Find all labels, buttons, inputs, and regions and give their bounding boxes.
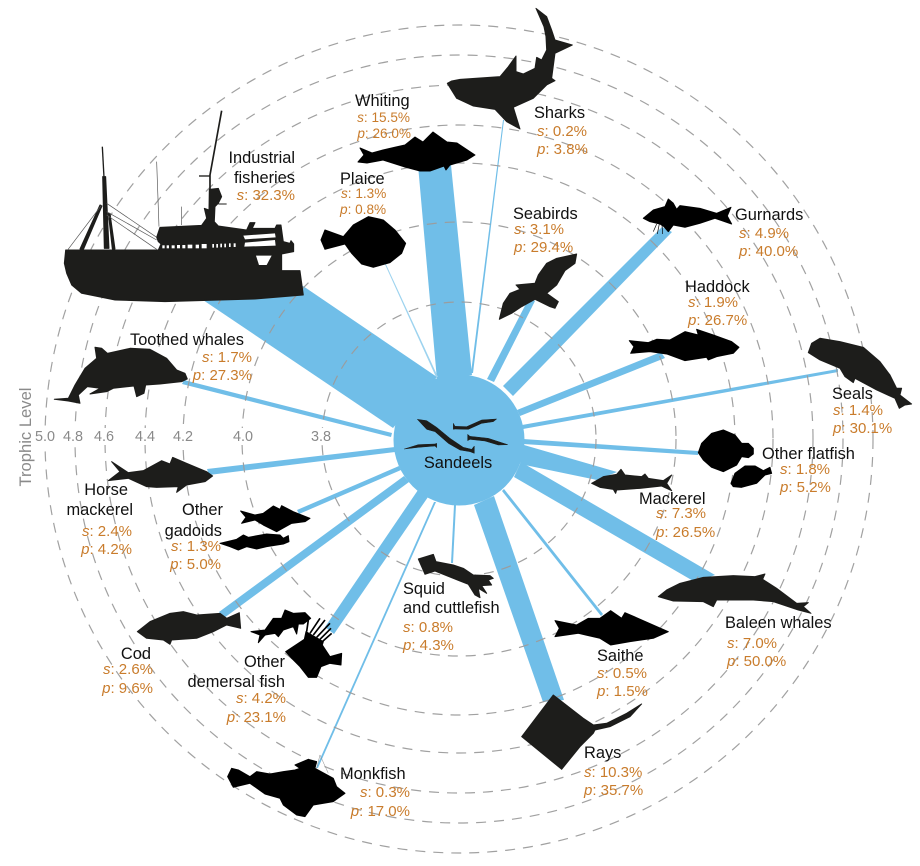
label: toothed whales bbox=[130, 331, 252, 384]
label: squid and cuttlefish: and cuttlefish bbox=[403, 599, 500, 617]
label: sharks: p: 3.8% bbox=[536, 141, 588, 158]
label: mackerel: s: 7.3% bbox=[656, 505, 706, 522]
label: industrial fisheries: Industrial bbox=[228, 149, 295, 167]
band: other demersal fish bbox=[325, 490, 428, 634]
band: monkfish bbox=[316, 502, 436, 768]
label: cod bbox=[101, 645, 153, 697]
label: saithe: Saithe bbox=[597, 647, 643, 665]
band: haddock bbox=[517, 352, 665, 416]
label: cod: p: 9.6% bbox=[101, 680, 153, 697]
label: haddock: s: 1.9% bbox=[688, 294, 738, 311]
label: rays: p: 35.7% bbox=[583, 782, 643, 799]
band: plaice bbox=[383, 260, 438, 377]
label: other demersal fish: Other bbox=[244, 653, 286, 671]
axis: trophic level: 4.0 bbox=[233, 429, 253, 445]
label: haddock bbox=[685, 278, 750, 329]
label: monkfish: Monkfish bbox=[340, 765, 406, 783]
axis: trophic level: 5.0 bbox=[35, 429, 55, 445]
label: other flatfish bbox=[762, 445, 855, 496]
label: horse mackerel bbox=[66, 481, 133, 558]
label: saithe bbox=[596, 647, 648, 700]
icon: other demersal fish bbox=[251, 610, 342, 677]
label: squid and cuttlefish bbox=[402, 580, 500, 654]
label: squid and cuttlefish: p: 4.3% bbox=[402, 637, 454, 654]
label: squid and cuttlefish: Squid bbox=[403, 580, 445, 598]
label: haddock: Haddock bbox=[685, 278, 750, 296]
label: gurnards: s: 4.9% bbox=[739, 225, 789, 242]
label: seabirds bbox=[513, 205, 578, 256]
band: whiting bbox=[418, 165, 472, 380]
band: toothed whales bbox=[182, 380, 392, 437]
band: saithe bbox=[502, 489, 603, 616]
label: plaice: Plaice bbox=[340, 170, 385, 188]
icon: horse mackerel bbox=[108, 457, 213, 492]
icon: toothed whale bbox=[54, 347, 187, 403]
label: gurnards bbox=[735, 206, 803, 260]
band: rays bbox=[474, 496, 564, 702]
band: sharks bbox=[471, 120, 504, 373]
label: other flatfish: p: 5.2% bbox=[779, 479, 831, 496]
label: other gadoids: s: 1.3% bbox=[171, 538, 221, 555]
icon: gurnard bbox=[643, 199, 732, 234]
icon: cod bbox=[137, 612, 241, 644]
band: industrial fisheries bbox=[203, 286, 437, 428]
label: rays bbox=[583, 744, 643, 799]
icon: plaice bbox=[321, 217, 406, 267]
label: cod: s: 2.6% bbox=[103, 661, 153, 678]
label: monkfish: s: 0.3% bbox=[360, 784, 410, 801]
label: horse mackerel: s: 2.4% bbox=[82, 523, 132, 540]
axis: trophic level: 3.8 bbox=[311, 429, 331, 445]
label: industrial fisheries: fisheries bbox=[234, 169, 295, 187]
icon: ray bbox=[522, 695, 642, 769]
band: other flatfish bbox=[523, 439, 698, 455]
icon: other gadoids bbox=[220, 506, 310, 550]
label: other gadoids: Other bbox=[182, 501, 224, 519]
label: seabirds: p: 29.4% bbox=[513, 239, 573, 256]
icon: baleen whale bbox=[658, 574, 811, 613]
axis: trophic level: 4.2 bbox=[173, 429, 193, 445]
icon: monkfish bbox=[228, 755, 345, 817]
label: cod: Cod bbox=[121, 645, 151, 663]
icon: whiting bbox=[358, 132, 475, 171]
label: whiting: p: 26.0% bbox=[356, 126, 411, 141]
label: toothed whales: Toothed whales bbox=[130, 331, 244, 349]
label: sharks bbox=[534, 104, 588, 158]
band: baleen whales bbox=[514, 462, 715, 582]
icon: mackerel bbox=[592, 469, 672, 493]
label: toothed whales: s: 1.7% bbox=[202, 349, 252, 366]
label: other gadoids: gadoids bbox=[165, 522, 222, 540]
central circle: sandeels bbox=[394, 374, 524, 506]
label: saithe: s: 0.5% bbox=[597, 665, 647, 682]
label: sandeels: Sandeels bbox=[424, 454, 492, 472]
label: other demersal fish: demersal fish bbox=[188, 673, 285, 691]
label: haddock: p: 26.7% bbox=[687, 312, 747, 329]
axis: trophic level: 4.4 bbox=[135, 429, 155, 445]
label: baleen whales bbox=[725, 614, 832, 670]
label: sharks: Sharks bbox=[534, 104, 585, 122]
label: seals: Seals bbox=[832, 385, 873, 403]
label: monkfish bbox=[340, 765, 410, 820]
label: horse mackerel: Horse bbox=[84, 481, 128, 499]
icon: seal bbox=[808, 338, 912, 408]
label: plaice bbox=[339, 170, 386, 217]
label: other demersal fish: s: 4.2% bbox=[236, 690, 286, 707]
label: other flatfish: s: 1.8% bbox=[780, 461, 830, 478]
icon: sandeels bbox=[404, 419, 508, 453]
label: other demersal fish bbox=[188, 653, 286, 726]
label: industrial fisheries bbox=[228, 149, 295, 204]
label: seals: p: 30.1% bbox=[832, 420, 892, 437]
label: mackerel: p: 26.5% bbox=[655, 524, 715, 541]
label: whiting: Whiting bbox=[355, 92, 410, 110]
label: plaice: s: 1.3% bbox=[341, 186, 386, 201]
label: toothed whales: p: 27.3% bbox=[192, 367, 252, 384]
label: plaice: p: 0.8% bbox=[339, 202, 386, 217]
label: other flatfish: Other flatfish bbox=[762, 445, 855, 463]
band: gurnards bbox=[503, 227, 672, 396]
label: monkfish: p: 17.0% bbox=[350, 803, 410, 820]
label: rays: Rays bbox=[584, 744, 621, 762]
band: horse mackerel bbox=[207, 447, 395, 475]
band: seals bbox=[522, 369, 838, 429]
icon: saithe bbox=[555, 611, 668, 645]
axis: trophic level: Trophic Level bbox=[16, 388, 35, 486]
icon: haddock bbox=[629, 329, 739, 361]
label: other demersal fish: p: 23.1% bbox=[226, 709, 286, 726]
band: cod bbox=[219, 476, 409, 618]
band: other gadoids bbox=[297, 466, 401, 514]
label: whiting: s: 15.5% bbox=[357, 110, 410, 125]
axis: trophic level: 4.6 bbox=[94, 429, 114, 445]
label: industrial fisheries: s: 32.3% bbox=[237, 187, 295, 204]
label: baleen whales: s: 7.0% bbox=[727, 635, 777, 652]
label: whiting bbox=[355, 92, 411, 141]
label: baleen whales: Baleen whales bbox=[725, 614, 832, 632]
label: horse mackerel: mackerel bbox=[66, 501, 133, 519]
label: other gadoids bbox=[165, 501, 224, 573]
label: seals: s: 1.4% bbox=[833, 402, 883, 419]
label: other gadoids: p: 5.0% bbox=[169, 556, 221, 573]
label: sharks: s: 0.2% bbox=[537, 123, 587, 140]
label: baleen whales: p: 50.0% bbox=[726, 653, 786, 670]
label: seabirds: Seabirds bbox=[513, 205, 578, 223]
label: gurnards: Gurnards bbox=[735, 206, 803, 224]
icon: industrial fishing vessel bbox=[64, 111, 303, 302]
label: seabirds: s: 3.1% bbox=[514, 221, 564, 238]
band: seabirds bbox=[487, 298, 535, 382]
axis: trophic level bbox=[16, 388, 335, 486]
label: horse mackerel: p: 4.2% bbox=[80, 541, 132, 558]
icon: other flatfish bbox=[698, 430, 772, 487]
label: saithe: p: 1.5% bbox=[596, 683, 648, 700]
icon: shark bbox=[447, 8, 572, 129]
label: rays: s: 10.3% bbox=[584, 764, 642, 781]
label: squid and cuttlefish: s: 0.8% bbox=[403, 619, 453, 636]
label: seals bbox=[832, 385, 892, 437]
icon: seabird bbox=[499, 254, 577, 319]
label: mackerel bbox=[639, 490, 715, 541]
band: mackerel bbox=[520, 445, 617, 480]
icon: squid bbox=[418, 554, 493, 598]
axis: trophic level: 4.8 bbox=[63, 429, 83, 445]
label: mackerel: Mackerel bbox=[639, 490, 706, 508]
band: squid bbox=[451, 505, 456, 563]
label: gurnards: p: 40.0% bbox=[738, 243, 798, 260]
